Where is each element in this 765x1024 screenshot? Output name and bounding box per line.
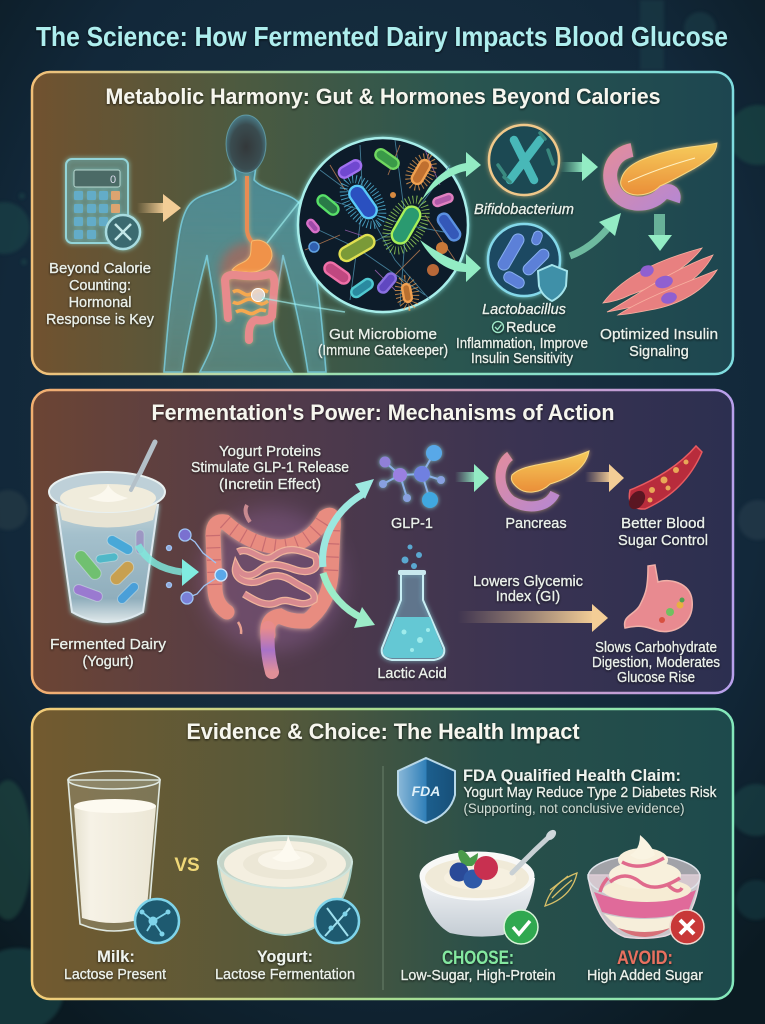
badge: cross [670,910,704,944]
intestines [225,274,274,340]
text: slows carbohydrate [592,640,720,686]
icon: intestines [200,505,344,672]
spoon [512,836,550,873]
icon: lactobacillus [488,224,567,301]
text: FDA claim: FDA Qualified Health Claim: [463,766,681,785]
badge: check [504,910,538,944]
text: better blood sugar control [618,516,708,549]
arrow: bifidobacterium to pancreas [560,153,598,181]
icon: healthy yogurt bowl [420,828,558,937]
text: fermented dairy [50,637,167,670]
icon: pancreas [610,143,717,204]
text: lowers glycemic index: Index (GI) [496,589,560,605]
text: fermented dairy: Fermented Dairy [50,637,167,653]
text: beyond calorie counting [46,261,155,328]
text: beyond calorie counting: Response is Key [46,312,155,328]
text: beyond calorie counting: Counting: [69,278,131,294]
icon: shield [538,265,567,301]
arrow: pancreas to blood vessel [585,464,624,492]
human body silhouette [164,115,326,372]
arrow: intestine to lactic acid [323,573,375,628]
arrow: pancreas to muscle [648,214,672,251]
text: lowers glycemic index: Lowers Glycemic [473,574,583,590]
icon: stomach [625,565,692,632]
text: lowers glycemic index [473,574,583,605]
heading: fermentation's power: Fermentation's Power: Mechanisms of Action [152,400,614,425]
text: yogurt: Lactose Fermentation [215,967,355,983]
text: slows carbohydrate: Slows Carbohydrate [595,640,717,656]
icon: bifidobacterium [489,125,559,195]
label: lactobacillus: Lactobacillus [482,302,566,318]
microbiome circle [298,138,468,312]
panel: fermentation's power [32,390,733,693]
esophagus and stomach [232,176,272,272]
icon: sugary parfait [588,835,700,938]
text: reduce inflammation: Insulin Sensitivity [471,351,574,367]
badge: crossed molecule [315,899,359,943]
arrow: lactobacillus to pancreas [570,213,621,256]
icon: muscle outline [545,873,577,906]
whipped cream [600,835,691,902]
arrow: microbiome to lactobacillus [420,240,481,282]
berries [450,850,498,888]
arrow: microbiome to bifidobacterium [422,152,481,200]
icon: bowl of yogurt [218,835,352,935]
icon: blood vessel [626,446,702,512]
text: FDA claim: Yogurt May Reduce Type 2 Diabetes Risk [464,785,717,801]
label: pancreas: Pancreas [505,516,567,532]
text: milk [64,947,166,983]
text: gut microbiome: Gut Microbiome [329,327,437,343]
arrow: calculator to body [137,194,181,222]
label: lactic acid: Lactic Acid [377,666,447,682]
text: reduce inflammation: Inflammation, Improve [456,336,588,352]
text: yogurt proteins: Yogurt Proteins [219,444,321,460]
text: optimized insulin signaling: Signaling [629,344,689,360]
badge: molecule [135,899,179,943]
spoon [130,442,155,494]
text: beyond calorie counting: Beyond Calorie [49,261,151,277]
text: FDA claim: (Supporting, not conclusive evidence) [464,801,684,816]
text: slows carbohydrate: Digestion, Moderates [592,655,720,671]
text: FDA claim [463,766,717,816]
panel: metabolic harmony [32,72,733,374]
text: choose: Low-Sugar, High-Protein [400,968,556,984]
text: yogurt proteins [191,444,349,493]
arrow: lactic acid to stomach [458,604,608,632]
molecule chain [166,529,227,604]
zoom lines to microbiome [262,197,345,312]
text: slows carbohydrate: Glucose Rise [617,670,695,686]
icon: GLP-1 molecule [379,445,445,508]
arrow: yogurt to intestine [138,545,199,586]
text: optimized insulin signaling: Optimized Insulin [600,327,718,343]
text: choose: CHOOSE: [442,948,514,969]
text: reduce inflammation [456,320,588,367]
text: beyond calorie counting: Hormonal [69,295,131,311]
text: yogurt [215,947,355,983]
label: vs: VS [174,855,200,876]
icon: muscle fibers [603,248,717,315]
text: avoid: AVOID: [617,948,673,969]
text: better blood sugar control: Better Blood [621,516,705,532]
text: yogurt proteins: (Incretin Effect) [219,477,321,493]
text: avoid: High Added Sugar [587,968,703,984]
text: better blood sugar control: Sugar Control [618,533,708,549]
panel: evidence and choice [32,709,733,999]
text: milk: Milk: [97,947,135,966]
text: reduce inflammation: Reduce [506,320,556,336]
arrow: GLP-1 to pancreas [455,464,489,492]
icon: lactic acid flask [382,544,444,660]
text: milk: Lactose Present [64,967,166,983]
icon: FDA shield: FDA [412,783,440,799]
heading: evidence and choice: Evidence & Choice: The Health Impact [186,719,580,744]
text: gut microbiome: (Immune Gatekeeper) [318,343,448,359]
label: GLP-1: GLP-1 [391,516,433,532]
text: gut microbiome [318,327,448,359]
arrow: intestine to GLP-1 [323,479,374,567]
icon: calculator [66,159,140,249]
icon: pancreas [500,451,589,506]
heading: metabolic harmony: Metabolic Harmony: Gut & Hormones Beyond Calories [106,84,660,109]
text: choose [400,948,556,984]
label: bifidobacterium: Bifidobacterium [474,202,574,218]
icon: glass of milk [68,771,160,931]
text: optimized insulin signaling [600,327,718,360]
text: yogurt proteins: Stimulate GLP-1 Release [191,460,349,476]
text: avoid [587,948,703,984]
icon: yogurt cup [49,442,165,622]
icon: calculator: 0 [110,174,116,186]
text: fermented dairy: (Yogurt) [82,654,134,670]
bacteria in yogurt [72,530,144,605]
bacteria [306,147,463,308]
icon: FDA shield [398,758,455,823]
text: yogurt: Yogurt: [257,947,313,966]
